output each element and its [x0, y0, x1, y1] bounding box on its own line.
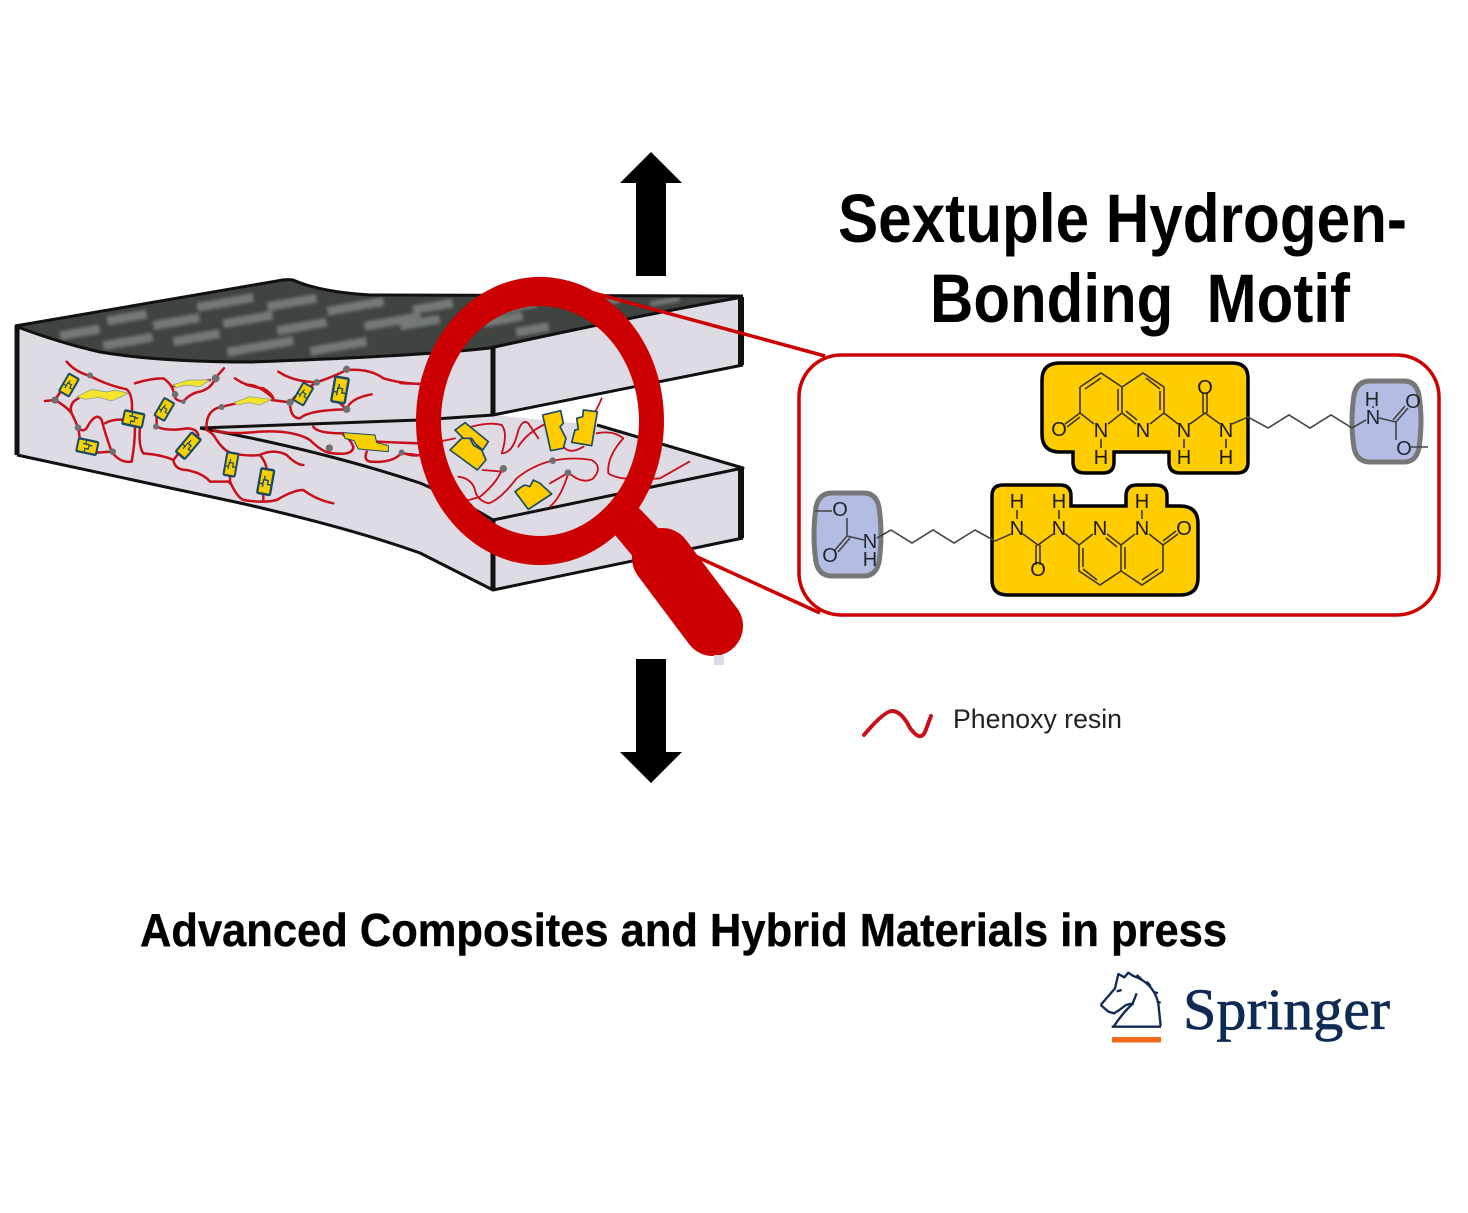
- atom labels: O: [1051, 419, 1067, 441]
- icon: knight horse: [1101, 973, 1161, 1027]
- block edge outlines: [15, 280, 743, 590]
- atom labels: N: [1093, 518, 1107, 540]
- yellow motif block: [992, 485, 1198, 595]
- magnified view of polymer and dimers: [399, 382, 689, 509]
- enlarged yellow dimers: [450, 410, 597, 509]
- atom labels: N: [1052, 518, 1066, 540]
- legend label: Phenoxy resin: [953, 704, 1122, 734]
- blue end group: [814, 493, 881, 576]
- grey junction points: [51, 366, 404, 455]
- atom labels: N: [1010, 518, 1024, 540]
- atom labels: O: [832, 499, 848, 521]
- legend: phenoxy resin: [864, 704, 1122, 736]
- yellow motif block: [1042, 363, 1248, 473]
- detail box with sextuple hydrogen-bonding motif: [799, 355, 1439, 615]
- springer logo: [1101, 973, 1390, 1042]
- icon: red chain: [864, 711, 931, 736]
- title: Bonding Motif: [930, 260, 1351, 337]
- title: [838, 180, 1407, 337]
- arrow up: [620, 152, 682, 276]
- atom labels: [822, 491, 1192, 581]
- atom labels: H: [1365, 389, 1379, 411]
- composite laminate block: [0, 270, 760, 590]
- bonds: [1017, 510, 1178, 585]
- carbon fibre fabric top surface: [20, 281, 732, 360]
- atom labels: H: [1219, 447, 1233, 469]
- atom labels: H: [1052, 491, 1066, 513]
- atom labels: H: [1094, 447, 1108, 469]
- callout lines from lens to detail box: [590, 292, 825, 613]
- wordmark: Springer: [1183, 977, 1390, 1042]
- journal line: Advanced Composites and Hybrid Materials in press: [140, 904, 1227, 956]
- atom labels: N: [1136, 420, 1150, 442]
- atom labels: N: [1094, 420, 1108, 442]
- atom labels: H: [863, 549, 877, 571]
- atom labels: [1051, 377, 1421, 469]
- red rounded frame: [799, 355, 1439, 615]
- hexyl linker: [815, 511, 1011, 552]
- atom labels: O: [1197, 377, 1213, 399]
- atom labels: H: [1010, 491, 1024, 513]
- arrow down: [620, 659, 682, 783]
- atom labels: N: [1135, 518, 1149, 540]
- hexyl linker: [1232, 406, 1428, 447]
- lower motif: [814, 485, 1198, 595]
- magnifying glass: [416, 277, 713, 626]
- phenoxy resin chains under lens: [400, 382, 689, 507]
- blue end group: [1352, 381, 1421, 462]
- bonds: [1065, 373, 1226, 448]
- atom labels: N: [1177, 420, 1191, 442]
- atom labels: O: [822, 545, 838, 567]
- phenoxy resin chains: [45, 362, 420, 503]
- hydrogen-bonded yellow dimers: [59, 374, 388, 495]
- atom labels: O: [1405, 391, 1421, 413]
- atom labels: O: [1396, 438, 1412, 460]
- lavender side faces of the cracked block: [15, 297, 743, 590]
- atom labels: N: [863, 531, 877, 553]
- atom labels: H: [1177, 447, 1191, 469]
- atom labels: N: [1366, 407, 1380, 429]
- atom labels: O: [1030, 559, 1046, 581]
- atom labels: H: [1135, 491, 1149, 513]
- junction points: [399, 450, 571, 476]
- atom labels: O: [1176, 518, 1192, 540]
- orange underline: [1112, 1037, 1161, 1042]
- atom labels: N: [1219, 420, 1233, 442]
- upper motif: [1042, 363, 1428, 473]
- polymer network in the laminate: [45, 362, 420, 503]
